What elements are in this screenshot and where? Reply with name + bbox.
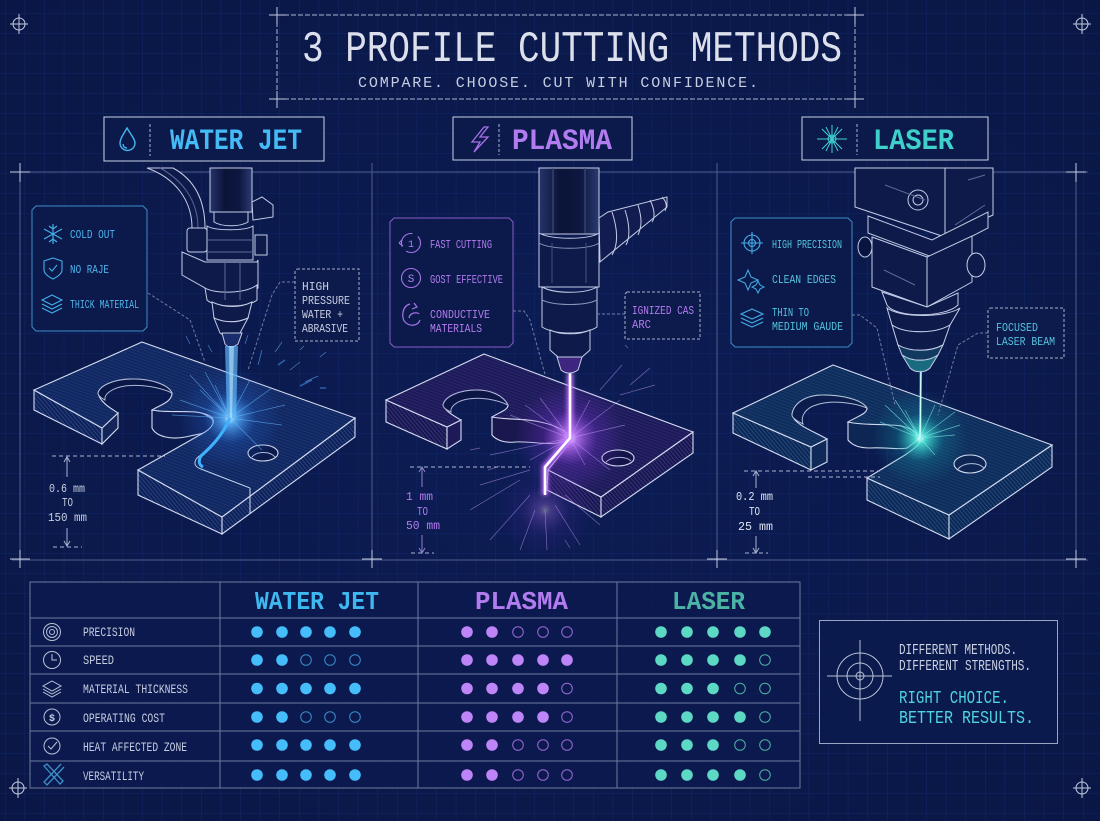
table headers: LASER xyxy=(672,587,745,617)
callout: laser features: MEDIUM GAUDE xyxy=(772,320,843,334)
icon: cost xyxy=(402,268,420,288)
icon: water drop xyxy=(120,128,135,150)
laser beam xyxy=(920,372,921,438)
icon: sparkles xyxy=(738,270,764,293)
panel: water jet illustration xyxy=(34,168,355,534)
callout: water jet features xyxy=(32,206,147,331)
comparison table xyxy=(30,582,800,788)
icon: snowflake xyxy=(44,224,62,244)
table headers xyxy=(255,587,745,617)
title: 3 PROFILE CUTTING METHODS xyxy=(302,25,842,75)
row: precision xyxy=(44,624,771,640)
icon: shield xyxy=(44,258,62,279)
callout: high pressure label: WATER + xyxy=(302,308,343,322)
callout: plasma features: GOST EFFECTIVE xyxy=(430,273,503,287)
heading: plasma: PLASMA xyxy=(512,125,612,159)
icon: target xyxy=(827,640,892,721)
callout: water jet features: NO RAJE xyxy=(70,263,109,277)
dimension: water jet thickness: 150 mm xyxy=(48,511,87,525)
panel: laser illustration xyxy=(733,168,1052,539)
corner target: top left xyxy=(10,14,28,34)
row: versatility: VERSATILITY xyxy=(83,770,144,784)
nozzle: water jet head xyxy=(147,168,273,347)
callout: summary: BETTER RESULTS. xyxy=(899,709,1034,729)
callout: laser features: CLEAN EDGES xyxy=(772,273,836,287)
callout: plasma features: 1 xyxy=(408,240,414,251)
heading: laser xyxy=(802,117,988,160)
water jet beam xyxy=(225,346,238,418)
row: operating cost: OPERATING COST xyxy=(83,712,165,726)
icon: conductive coil xyxy=(403,303,420,325)
row: material thickness xyxy=(43,681,770,697)
icon: layers xyxy=(741,309,763,327)
row: versatility xyxy=(44,764,770,785)
callout: laser features: HIGH PRECISION xyxy=(772,238,842,252)
dimension: laser thickness: 0.2 mm xyxy=(736,490,773,504)
row: heat affected zone: HEAT AFFECTED ZONE xyxy=(83,741,187,755)
callout: water jet features: THICK MATERIAL xyxy=(70,298,139,312)
callout: high pressure label: ABRASIVE xyxy=(302,322,348,336)
callout: plasma features: CONDUCTIVE xyxy=(430,308,490,322)
callout: plasma features: FAST CUTTING xyxy=(430,238,492,252)
blueprint frame xyxy=(10,163,1088,568)
callout: high pressure label: HIGH xyxy=(302,280,329,294)
row: material thickness: MATERIAL THICKNESS xyxy=(83,683,188,697)
icon: crosshair xyxy=(741,232,763,254)
dimension: water jet thickness: TO xyxy=(62,496,73,510)
callout: ionized gas label: ARC xyxy=(632,318,651,332)
row: heat affected zone xyxy=(44,738,770,755)
callout: plasma features xyxy=(390,218,513,347)
callout: focused laser beam label: FOCUSED xyxy=(996,321,1038,335)
callout: summary: RIGHT CHOICE. xyxy=(899,689,1009,709)
corner target: bottom right xyxy=(1073,778,1091,798)
row: speed: SPEED xyxy=(83,654,114,668)
panel: plasma illustration xyxy=(386,168,693,560)
table headers: PLASMA xyxy=(475,587,568,617)
heading: water jet xyxy=(104,117,324,161)
callout: summary: DIFFERENT STRENGTHS. xyxy=(899,658,1031,675)
corner target: top right xyxy=(1073,14,1091,34)
plate: laser workpiece xyxy=(733,365,1052,539)
plate: plasma workpiece xyxy=(386,354,693,517)
dimension: plasma thickness: 1 mm xyxy=(406,490,433,504)
callout: plasma features: S xyxy=(408,274,415,286)
dimension: plasma thickness: TO xyxy=(417,505,428,519)
callout: laser features xyxy=(731,218,852,347)
icon: speed dial xyxy=(399,234,420,252)
row: operating cost: $ xyxy=(49,713,55,725)
heading: laser: LASER xyxy=(873,125,954,159)
laser cut glow xyxy=(872,390,968,486)
dimension: plasma thickness xyxy=(406,467,530,553)
leader lines: water jet xyxy=(148,282,295,370)
dimension: water jet thickness: 0.6 mm xyxy=(49,482,85,496)
icon: lightning bolt xyxy=(472,127,488,152)
callout: plasma features: MATERIALS xyxy=(430,322,482,336)
torch: plasma head xyxy=(539,168,667,373)
table headers: WATER JET xyxy=(255,587,379,617)
plate: water jet workpiece xyxy=(34,342,355,534)
leader lines: plasma xyxy=(513,311,625,378)
title block xyxy=(269,7,864,108)
row: operating cost xyxy=(44,709,770,726)
callout: laser features: THIN TO xyxy=(772,306,809,320)
dimension: plasma thickness: 50 mm xyxy=(406,519,440,533)
icon: layers xyxy=(42,295,62,313)
water jet cut glow xyxy=(172,335,326,470)
callout: high pressure label xyxy=(295,269,359,341)
callout: summary xyxy=(820,620,1058,744)
icon: laser burst xyxy=(817,125,847,153)
callout: high pressure label: PRESSURE xyxy=(302,294,350,308)
row: precision: PRECISION xyxy=(83,626,135,640)
callout: ionized gas label: IGNIZED CAS xyxy=(632,304,694,318)
dimension: laser thickness xyxy=(736,471,880,553)
corner target: bottom left xyxy=(9,778,27,798)
callout: summary: DIFFERENT METHODS. xyxy=(899,642,1017,659)
callout: ionized gas label xyxy=(625,292,700,339)
callout: water jet features: COLD OUT xyxy=(70,228,115,242)
dimension: water jet thickness xyxy=(48,456,165,547)
callout: focused laser beam label: LASER BEAM xyxy=(996,335,1055,349)
row: speed xyxy=(44,652,770,668)
leader lines: laser xyxy=(852,315,988,415)
laser head xyxy=(855,168,993,372)
heading: water jet: WATER JET xyxy=(170,125,302,159)
heading: plasma xyxy=(453,117,632,160)
subtitle: COMPARE. CHOOSE. CUT WITH CONFIDENCE. xyxy=(358,75,758,92)
plasma cut glow xyxy=(470,345,655,560)
dimension: laser thickness: 25 mm xyxy=(738,520,773,534)
callout: focused laser beam label xyxy=(988,308,1064,358)
dimension: laser thickness: TO xyxy=(749,505,760,519)
